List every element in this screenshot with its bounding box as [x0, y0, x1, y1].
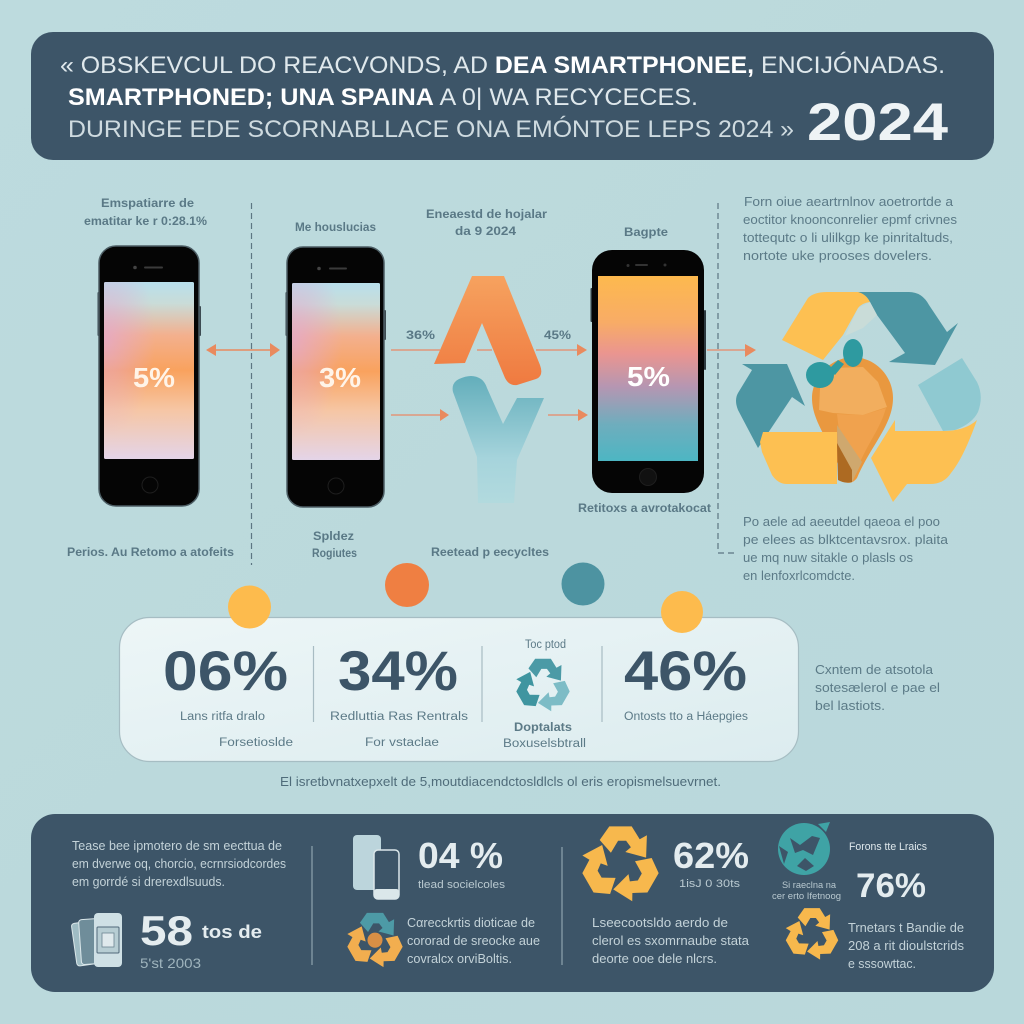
teal dot [562, 562, 604, 606]
column 4 caption: Retitoxs a avrotakocat [578, 501, 711, 515]
stat 46% [624, 639, 748, 723]
orange bulb [812, 357, 893, 483]
icon: yellow recycle small [781, 908, 842, 963]
footer panel [31, 814, 994, 992]
side note: bel lastiots. [815, 698, 885, 713]
right description bottom: en lenfoxrlcomdcte. [743, 568, 855, 583]
stat 06%: Lans ritfa dralo [180, 711, 265, 723]
bulb rock [819, 367, 887, 415]
arrow into phone 3 bottom [548, 409, 588, 421]
recycling column: Toc ptod [525, 639, 566, 651]
footer text block 2: covralcx orviBoltis. [407, 951, 512, 966]
footer text block 2: Cαrecckrtis dioticae de [407, 915, 535, 930]
arrow into A [391, 349, 492, 351]
footer text block 3 [592, 915, 750, 966]
stat 58: 5'st 2003 [140, 955, 201, 971]
footer text block 1 [72, 838, 286, 889]
footer text block 1: em dverwe oq, chorcio, ecrnrsiodcordes [72, 856, 286, 871]
column 2 heading: Me houslucias [295, 220, 376, 234]
icon: globe [778, 822, 830, 875]
column 4 heading: Bagpte [624, 225, 668, 239]
stat 76%: Forons tte Lraics [849, 841, 927, 853]
letter shape Y [453, 376, 544, 503]
right description bottom: Po aele ad aeeutdel qaeoa el poo [743, 514, 940, 529]
label 45%: 45% [544, 328, 571, 342]
right description top: eoctitor knoonconrelier epmf crivnes [743, 212, 958, 227]
stat 34% [330, 639, 468, 749]
double arrow between phones [206, 343, 280, 357]
side note: Cxntem de atsotola [815, 662, 934, 677]
footer text block 3: deorte ooe dele nlcrs. [592, 951, 717, 966]
dashed divider right [718, 203, 738, 553]
right description bottom: ue mq nuw sitakle o plasls os [743, 550, 913, 565]
right description top [743, 194, 958, 263]
column 3 heading [426, 207, 547, 238]
right description bottom: pe elees as blktcentavsrox. plaita [743, 532, 949, 547]
stat 58 [140, 907, 262, 971]
stat 58: tos de [202, 922, 262, 942]
value 5%: 5% [133, 362, 175, 393]
phone 2 [286, 247, 386, 507]
footer text block 2 [407, 915, 540, 966]
right description top: nortote uke prooses dovelers. [743, 248, 932, 263]
bulb lower facet [837, 408, 886, 470]
yellow arrow bottom right [871, 420, 977, 502]
year: 2024 [807, 93, 949, 152]
phone 3 [590, 250, 706, 493]
value 5%: 5% [627, 361, 670, 392]
stat 04%: 04 % [418, 835, 503, 876]
teal arrow top [858, 292, 958, 365]
globe caption: cer erto Ifetnoog [772, 891, 841, 902]
yellow arrow bottom left [760, 432, 837, 484]
column 3 heading: Eneaestd de hojalar [426, 207, 547, 221]
stat 34%: For vstaclae [365, 737, 439, 749]
column 3 heading: da 9 2024 [455, 224, 516, 238]
column 1 heading [84, 196, 207, 228]
bulb stem [837, 443, 852, 483]
side note [815, 662, 940, 713]
large recycling illustration [736, 292, 981, 502]
label 36%: 36% [406, 328, 435, 342]
stat 04% [418, 835, 506, 891]
icon: small teal recycle [511, 659, 573, 714]
side note: sotesælerol e pae el [815, 680, 940, 695]
yellow dot left [228, 586, 271, 628]
yellow dot right [661, 591, 703, 633]
stat 46%: Ontosts tto a Háepgies [624, 711, 748, 723]
banner background [31, 32, 994, 160]
stat 34%: Redluttia Ras Rentrals [330, 711, 468, 723]
letter shape A [434, 276, 541, 385]
title line 3: DURINGE EDE SCORNABLLACE ONA EMÓNTOE LEPS 2024 » [68, 116, 794, 143]
stat 58: 58 [140, 907, 193, 954]
column 1 heading: Emspatiarre de [101, 196, 194, 210]
icon: stacked phones [71, 913, 122, 967]
bulb tan facet [837, 425, 862, 482]
stat 76%: 76% [856, 867, 926, 905]
footer text block 4: e sssowttac. [848, 956, 916, 971]
title line 2: SMARTPHONED; UNA SPAINA A 0| WA RECYCECES. [68, 84, 698, 111]
grey fold [845, 302, 877, 336]
teal arrow left [736, 364, 805, 448]
column 2 caption [312, 529, 357, 560]
footer background [31, 814, 994, 992]
icon: mixed recycle [342, 913, 406, 970]
title line 1: « OBSKEVCUL DO REACVONDS, AD DEA SMARTPHONEE, ENCIJÓNADAS. [60, 52, 945, 79]
stat 06% [163, 639, 293, 749]
stats caption: El isretbvnatxepxelt de 5,moutdiacendctosldlcls ol eris eropismelsuevrnet. [280, 774, 721, 789]
value 3%: 3% [319, 362, 361, 393]
icon: two phones [353, 835, 399, 899]
globe caption: Si raeclna na [782, 880, 837, 891]
stat 34%: 34% [338, 639, 458, 702]
column 1 heading: ematitar ke r 0:28.1% [84, 214, 207, 228]
stat 62%: 62% [673, 835, 749, 876]
arrow into phone 3 top [536, 344, 587, 356]
phone 1 [98, 246, 201, 506]
footer text block 2: cororad de sreocke aue [407, 933, 540, 948]
footer text block 3: clerol es sxomrnaube stata [592, 933, 750, 948]
recycling column: Doptalats [514, 722, 572, 734]
light teal arrow right [918, 358, 981, 431]
column 1 caption: Perios. Au Retomo a atofeits [67, 545, 234, 559]
right description top: Forn oiue aeartrnlnov aoetrortde a [744, 194, 954, 209]
arrow into Y [391, 409, 449, 421]
footer text block 1: em gorrdé si drerexdlsuuds. [72, 874, 225, 889]
recycling column: Boxuselsbtrall [503, 738, 586, 750]
footer text block 4 [848, 920, 964, 971]
footer text block 1: Tease bee ipmotero de sm eecttua de [72, 838, 282, 853]
right description bottom [743, 514, 949, 583]
arrow into recycling symbol [707, 344, 756, 357]
stat 62%: 1isJ 0 30ts [679, 878, 741, 890]
orange dot [385, 563, 429, 607]
teal lumps [806, 339, 863, 388]
recycling column [503, 639, 586, 750]
footer text block 4: Trnetars t Bandie de [848, 920, 964, 935]
stat 46%: 46% [624, 639, 747, 702]
header banner [31, 32, 994, 160]
yellow arrow top [782, 292, 870, 360]
column 2 caption: Rogiutes [312, 546, 357, 560]
stat 06%: 06% [163, 639, 288, 702]
stat 76% [849, 841, 927, 905]
column 3 caption: Reetead p eecycltes [431, 545, 549, 559]
icon: yellow recycle large [575, 826, 663, 906]
panel background [120, 618, 798, 762]
footer text block 3: Lseecootsldo aerdo de [592, 915, 728, 930]
right description top: tottequtc o li ulilkgp ke pinritaltuds, [743, 230, 953, 245]
stat 04%: tlead socielcoles [418, 879, 506, 891]
column 2 caption: Spldez [313, 529, 354, 543]
footer text block 4: 208 a rit dioulstcrids [848, 938, 964, 953]
stats panel [120, 586, 798, 762]
globe caption [772, 880, 841, 902]
dashed divider left [250, 203, 252, 565]
stat 06%: Forsetioslde [219, 737, 293, 749]
